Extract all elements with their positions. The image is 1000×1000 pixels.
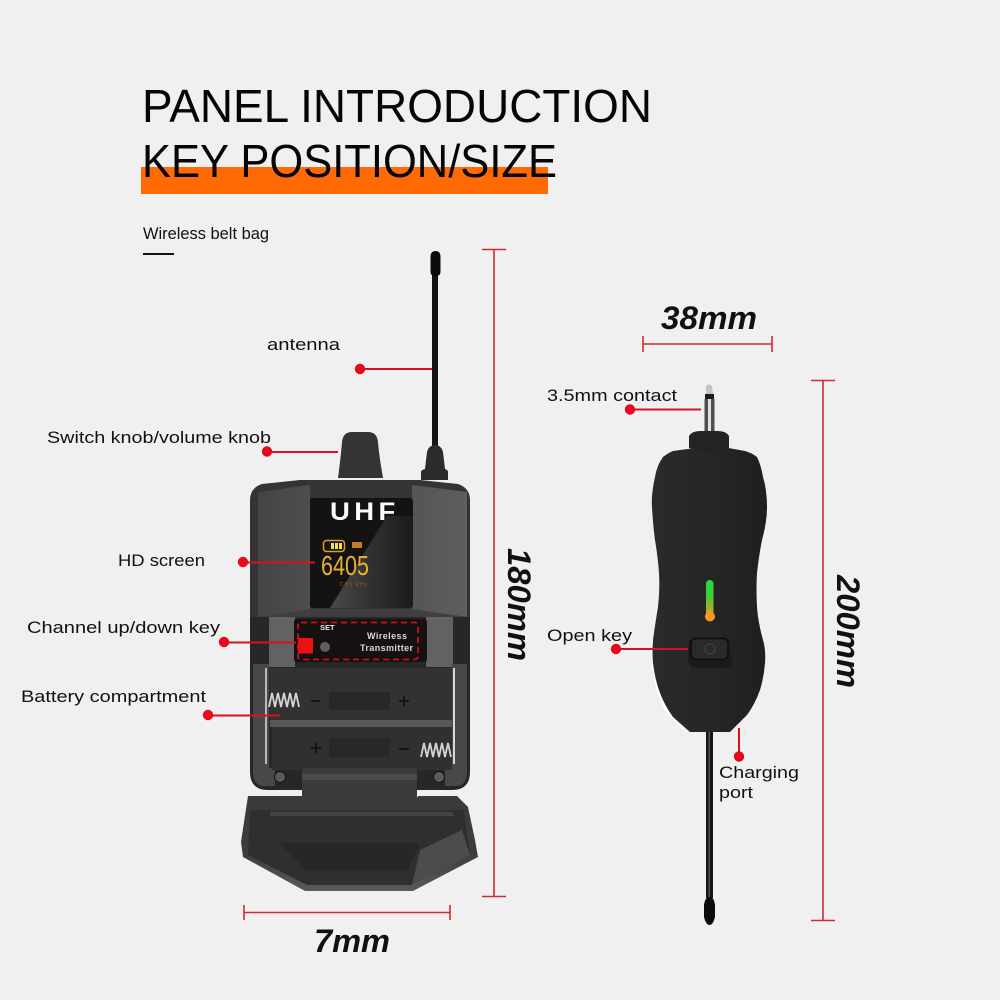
housing side facets xyxy=(258,485,467,617)
battery indicator xyxy=(324,540,362,552)
springs xyxy=(269,693,299,707)
battery door inner detail xyxy=(248,810,470,885)
title: PANEL INTRODUCTION xyxy=(142,80,652,132)
dimension: 7mm: 7mm xyxy=(314,923,390,959)
control panel: Transmitter xyxy=(360,643,413,653)
dimension: 38mm: 38mm xyxy=(661,300,757,336)
grey side strips xyxy=(269,617,453,667)
transmitter antenna xyxy=(421,251,448,480)
polarity marks xyxy=(311,696,409,753)
callout: channel key xyxy=(27,618,296,647)
LCD screen xyxy=(310,497,413,608)
dimension: 200mm: 200mm xyxy=(830,574,866,688)
lower antenna xyxy=(704,730,715,925)
callout: antenna xyxy=(267,335,432,374)
body edge highlight xyxy=(652,640,690,734)
volume knob xyxy=(338,432,383,478)
hinge xyxy=(302,768,417,800)
subtitle: wireless belt bag xyxy=(143,225,269,255)
control panel: SET xyxy=(320,623,335,632)
control panel: Wireless xyxy=(367,631,407,641)
channel key xyxy=(298,638,313,654)
3.5mm plug xyxy=(704,384,714,433)
UHF logo: UHF xyxy=(330,497,400,526)
callout: channel key: Channel up/down key xyxy=(27,618,221,637)
callout: HD screen: HD screen xyxy=(118,551,205,570)
frequency digits: 6405 xyxy=(321,550,369,581)
title xyxy=(142,80,652,187)
callout: switch knob xyxy=(47,428,338,457)
dimension: 180mm xyxy=(482,250,537,896)
collar xyxy=(689,431,729,451)
callout: switch knob: Switch knob/volume knob xyxy=(47,428,271,447)
mic body xyxy=(652,447,767,732)
small screen text: CH1 VHy xyxy=(340,582,368,588)
device: belt pack transmitter xyxy=(241,251,478,891)
callout: charging port: Charging xyxy=(719,763,799,782)
dimension: 7mm xyxy=(244,905,450,959)
callout: antenna: antenna xyxy=(267,335,341,354)
callout: open key: Open key xyxy=(547,626,633,645)
power button xyxy=(688,638,732,668)
callout: 3.5mm contact xyxy=(547,386,701,415)
LED indicator xyxy=(705,580,715,622)
battery compartment xyxy=(253,664,467,786)
callout: battery compartment: Battery compartment xyxy=(21,687,206,706)
callout: open key xyxy=(547,626,688,654)
transmitter lower frame xyxy=(250,617,470,790)
dimension: 38mm xyxy=(643,300,772,352)
title: KEY POSITION/SIZE xyxy=(142,135,557,187)
subtitle: wireless belt bag: Wireless belt bag xyxy=(143,225,269,243)
orange title highlight bar xyxy=(141,167,548,194)
callout: HD screen xyxy=(118,551,315,570)
battery door xyxy=(241,796,478,891)
screws xyxy=(274,772,444,782)
transmitter upper housing xyxy=(250,480,470,620)
dimension: 200mm xyxy=(811,380,866,920)
callout: 3.5mm contact: 3.5mm contact xyxy=(547,386,677,405)
device: handheld body pack xyxy=(652,384,767,925)
callout: battery compartment xyxy=(21,687,280,720)
control panel xyxy=(294,619,427,662)
callout: charging port xyxy=(719,728,799,802)
callout: charging port: port xyxy=(719,783,753,802)
dimension: 180mm: 180mm xyxy=(501,548,537,661)
